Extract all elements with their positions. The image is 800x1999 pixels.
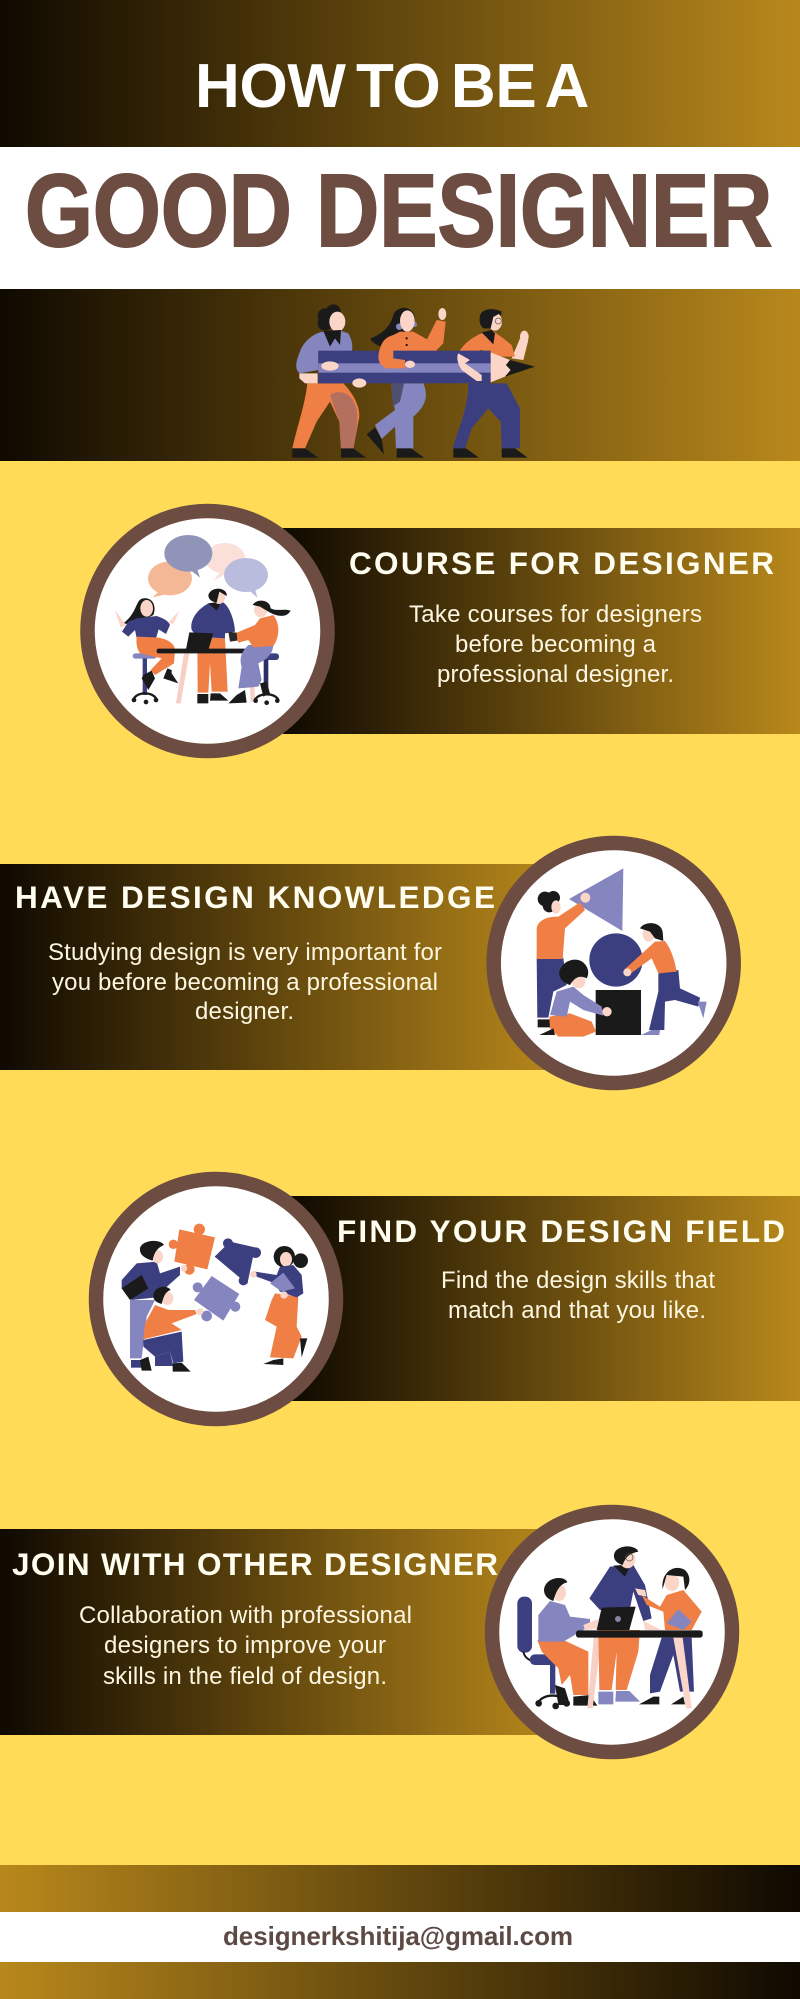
heading: JOIN WITH OTHER DESIGNER <box>12 1546 498 1582</box>
body text <box>48 939 442 1025</box>
body text: you before becoming a professional <box>52 969 438 996</box>
body text: skills in the field of design. <box>103 1663 387 1690</box>
heading: HAVE DESIGN KNOWLEDGE <box>15 879 495 915</box>
body text: designers to improve your <box>104 1632 386 1659</box>
title line two: GOOD DESIGNER <box>25 154 772 269</box>
panel: find your design field <box>96 1179 800 1419</box>
body text: before becoming a <box>455 631 657 658</box>
illustration: people fitting puzzle pieces <box>122 1224 308 1372</box>
footer contact band <box>0 1912 800 1962</box>
panel: course for designer <box>88 511 800 751</box>
body text: Collaboration with professional <box>79 1602 412 1629</box>
body text <box>441 1267 715 1324</box>
footer gradient band top <box>0 1865 800 1912</box>
circle badge <box>96 1179 336 1419</box>
body text: Studying design is very important for <box>48 939 442 966</box>
white title band <box>0 147 800 289</box>
body text: match and that you like. <box>448 1297 706 1324</box>
email address: designerkshitija@gmail.com <box>223 1921 573 1951</box>
panel: have design knowledge <box>0 843 734 1083</box>
body text: Take courses for designers <box>409 601 702 628</box>
title line one: HOW TO BE A <box>195 52 589 121</box>
header illustration band <box>0 289 800 461</box>
header band: how to be a <box>0 0 800 147</box>
illustration: designers at a desk with a laptop <box>517 1546 703 1709</box>
body text <box>79 1602 412 1690</box>
heading: COURSE FOR DESIGNER <box>349 545 774 581</box>
body text: designer. <box>195 998 294 1025</box>
heading: FIND YOUR DESIGN FIELD <box>337 1213 785 1249</box>
circle badge <box>492 1512 732 1752</box>
illustration: team meeting with speech bubbles <box>115 535 291 705</box>
illustration: people arranging shapes <box>537 868 707 1037</box>
circle badge <box>494 843 734 1083</box>
body text <box>409 601 702 688</box>
footer gradient band bottom <box>0 1962 800 1999</box>
body text: Find the design skills that <box>441 1267 715 1294</box>
circle badge <box>88 511 328 751</box>
body text: professional designer. <box>437 661 674 688</box>
panel: join with other designer <box>0 1512 732 1752</box>
illustration: three people carrying a pencil <box>292 304 535 458</box>
